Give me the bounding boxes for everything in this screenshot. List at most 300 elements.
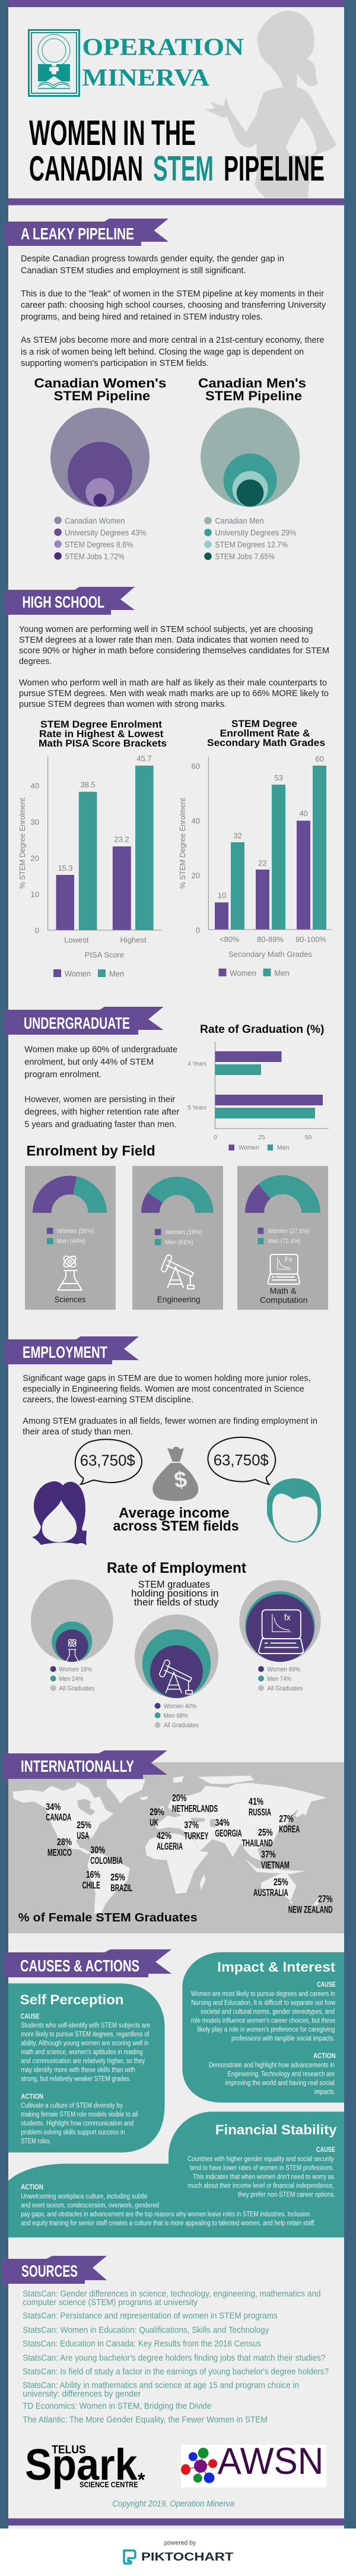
label: Sciences (55, 1295, 85, 1304)
country labels: VIETNAM (261, 1859, 290, 1870)
y axis label: % STEM Degree Enrolment (18, 797, 27, 889)
x axis labels (64, 935, 147, 959)
cause: Students who self-identify with STEM subjects are (21, 2022, 150, 2029)
legend: Canadian Women (65, 517, 125, 526)
cause (187, 2147, 335, 2198)
cause: CAUSE (21, 2013, 40, 2020)
high school text: Women who perform well in math are half as likely as their male counterparts to (19, 678, 327, 688)
section banner: causes and actions (4, 1949, 171, 1977)
cause: ability. Although young women are scoring well in (21, 2040, 149, 2047)
bars (215, 766, 326, 930)
heading (34, 376, 166, 403)
employment chart: engineering (135, 1614, 218, 1729)
donut chart (141, 1177, 214, 1213)
chart heading: Rate of Graduation (%) (200, 1023, 324, 1036)
chart heading: Secondary Math Grades (207, 738, 325, 748)
heading: rate of employment: Rate of Employment (107, 1560, 247, 1576)
action: STEM roles. (21, 2138, 51, 2145)
chart heading: Math PISA Score Brackets (39, 738, 167, 749)
donut chart (245, 1175, 320, 1213)
intro text: As STEM jobs become more and more central in a 21st-century economy, there (21, 335, 324, 345)
legend (218, 969, 290, 978)
y axis ticks (31, 782, 39, 935)
chart heading (39, 719, 167, 749)
icon: man's head (267, 1478, 321, 1543)
value labels: 60 (315, 754, 324, 763)
country labels: 27% (279, 1813, 294, 1824)
country labels: 42% (157, 1830, 171, 1841)
legend (50, 1666, 95, 1692)
legend: Men (274, 969, 290, 978)
section banner: high school: HIGH SCHOOL (23, 593, 104, 611)
icon: atom and flask (66, 1638, 78, 1662)
legend: All Graduates (267, 1685, 303, 1692)
title: CANADIAN (29, 149, 143, 188)
country labels: BRAZIL (110, 1882, 133, 1894)
y axis ticks (192, 762, 200, 935)
y axis ticks: 20 (192, 871, 200, 880)
logo: AWSN: AWSN (218, 2441, 323, 2482)
icon: woman's head (32, 1481, 87, 1545)
heading: enrolment by field: Enrolment by Field (26, 1143, 155, 1159)
country labels: NETHERLANDS (172, 1803, 218, 1814)
value labels: 10 (218, 891, 226, 900)
label: Engineering (157, 1295, 201, 1304)
panel: world map (8, 1762, 344, 1933)
icon: atom and flask (58, 1254, 82, 1290)
chart: Canadian women's pipeline (34, 376, 166, 561)
header (28, 11, 336, 198)
icon: money bag (152, 1447, 198, 1501)
footer: powered by Piktochart (124, 2539, 234, 2564)
chart heading: STEM Degree Enrolment (40, 719, 163, 730)
icon: laptop with formula: fx (284, 1613, 291, 1623)
source list: StatsCan: Education in Canada: Key Results from the 2016 Census (23, 2339, 261, 2349)
country labels: 34% (46, 1801, 61, 1812)
chart heading: STEM Degree (231, 719, 297, 729)
logo: AWSN (181, 2441, 326, 2488)
section banner: employment (4, 1336, 139, 1364)
country labels: COLOMBIA (90, 1855, 123, 1866)
section banner: high school (4, 587, 135, 615)
source list: TD Economics: Women in STEM, Bridging the Divide (23, 2401, 211, 2411)
x axis labels: Lowest (64, 935, 89, 944)
legend: Women 40% (164, 1703, 196, 1710)
footer: powered by Piktochart: PIKTOCHART (141, 2551, 234, 2564)
action: and equity training for senior staff creates a culture that is more appealing to talented women, and help retain staff. (21, 2220, 316, 2227)
panel: financial stability (8, 2112, 344, 2237)
legend: Women (27.6%) (268, 1228, 310, 1235)
panel: impact and interest (182, 1952, 344, 2103)
speech bubble: men's income: 63,750$ (214, 1451, 269, 1469)
icon: pump jack (158, 1659, 192, 1694)
bar chart: rate of graduation (187, 1023, 329, 1152)
legend (155, 1229, 202, 1246)
legend: Men (44%) (57, 1238, 85, 1245)
heading: STEM Pipeline (54, 388, 150, 403)
chart: Canadian men's pipeline (198, 376, 306, 561)
action: Cultivate a culture of STEM diversity by (21, 2102, 123, 2109)
action: Demonstrate and highlight how advancements in (209, 2062, 335, 2069)
value labels: 32 (233, 832, 242, 840)
country labels: UK (150, 1817, 158, 1828)
country labels: AUSTRALIA (253, 1887, 288, 1898)
legend: Women 69% (267, 1666, 300, 1673)
legend (53, 969, 124, 978)
high school text (19, 624, 329, 709)
intro text: Canadian STEM studies and employment is still significant. (21, 265, 246, 276)
bar chart: PISA score brackets (18, 719, 167, 978)
action: ACTION (21, 2093, 43, 2100)
speech bubble: women's income (75, 1439, 142, 1484)
category labels: 5 Years (187, 1105, 206, 1111)
action: Engineering, Technology and research are (228, 2071, 335, 2078)
title (29, 113, 325, 188)
intro text: Despite Canadian progress towards gender equity, the gender gap in (21, 254, 284, 264)
high school text: score 90% or higher in math before considering themselves candidates for STEM (19, 646, 329, 656)
section banner: internationally: INTERNATIONALLY (21, 1757, 134, 1775)
value labels: 38.5 (80, 780, 96, 789)
source list: StatsCan: Persistance and representation of women in STEM programs (23, 2311, 278, 2321)
legend (47, 1228, 94, 1245)
icon: money bag: $ (173, 1467, 189, 1493)
source list: The Atlantic: The More Gender Equality, the Fewer Women in STEM (23, 2415, 268, 2425)
undergraduate text (24, 1045, 179, 1130)
employment chart: math and computation (239, 1580, 321, 1692)
cause: societal and cultural norms, gender stereotypes, and (201, 2008, 335, 2015)
employment text: careers, the lowest-earning STEM discipline. (23, 1395, 193, 1405)
country labels: 29% (150, 1806, 164, 1818)
cause: they prefer non-STEM career options. (238, 2191, 335, 2198)
country labels: 41% (249, 1796, 263, 1807)
high school text: Young women are performing well in STEM school subjects, yet are choosing (19, 624, 313, 634)
country labels: 25% (274, 1876, 288, 1888)
intro text: career path: choosing high school courses, choosing and transferring University (21, 300, 326, 310)
icon: laptop with formula: Fx (285, 1256, 293, 1263)
value labels: 53 (274, 773, 283, 782)
chart heading: Rate in Highest & Lowest (39, 729, 164, 739)
action (209, 2053, 336, 2095)
y axis ticks: 0 (35, 926, 39, 935)
logo wordmark: OPERATION (82, 33, 244, 61)
y axis ticks: 40 (31, 782, 39, 791)
nested circles (201, 407, 300, 507)
legend: All Graduates (164, 1722, 199, 1729)
icon: laptop with formula (268, 1254, 300, 1284)
action (21, 2093, 138, 2145)
intro text: supporting women's participation in STEM fields. (21, 358, 209, 368)
cause: more likely to pursue STEM degrees, regardless of (21, 2031, 150, 2038)
label (260, 1286, 308, 1305)
x axis ticks: 0 (214, 1134, 217, 1141)
action: and overt sexism, condescension, overwork, gendered (21, 2202, 159, 2209)
cause: strong, but relatively weaker STEM grades. (21, 2075, 131, 2082)
heading: Impact & Interest (217, 1959, 335, 1975)
source list (23, 2289, 329, 2425)
legend: All Graduates (59, 1685, 95, 1692)
cause: CAUSE (316, 2147, 335, 2154)
employment text (23, 1373, 317, 1437)
icon: Piktochart mark (124, 2550, 135, 2564)
undergraduate text: Women make up 60% of undergraduate (24, 1045, 177, 1055)
legend: STEM Jobs 1.72% (65, 552, 125, 561)
legend: Men (72.4%) (268, 1238, 300, 1245)
cause: CAUSE (317, 1981, 336, 1989)
cause: Countries with higher gender equality and social security (187, 2155, 334, 2163)
x axis labels: 90-100% (295, 935, 326, 944)
nested circles (50, 407, 150, 507)
cause (21, 2013, 150, 2082)
source list: StatsCan: Ability in mathematics and science at age 15 and program choice in (23, 2381, 299, 2391)
title: STEM (153, 149, 214, 188)
section banner: causes and actions: CAUSES & ACTIONS (20, 1957, 139, 1975)
high school text: STEM degrees at a lower rate than men. Data indicates that women need to (19, 635, 309, 645)
logo: TELUS Spark Science Centre: Spark (25, 2440, 138, 2489)
value labels: 22 (258, 859, 267, 868)
y axis ticks: 40 (192, 817, 200, 826)
logo: TELUS Spark Science Centre: TELUS (52, 2444, 86, 2457)
heading: Self Perception (20, 1992, 124, 2007)
x axis labels: PISA Score (85, 950, 124, 959)
bars (215, 1051, 323, 1118)
logo wordmark: MINERVA (82, 64, 209, 91)
source list: StatsCan: Is field of study a factor in the earnings of young bachelor's degree holders? (23, 2367, 329, 2377)
heading: STEM Pipeline (205, 388, 302, 403)
cause: Nursing and Education. It is difficult to separate out how (191, 1999, 336, 2006)
legend: University Degrees 43% (65, 529, 146, 538)
subheading: holding positions in (131, 1588, 218, 1599)
action: students. Highlight how communication and (21, 2120, 134, 2127)
subheading (131, 1579, 219, 1608)
legend (204, 517, 296, 561)
country labels: ALGERIA (157, 1841, 183, 1852)
income heading (113, 1505, 239, 1534)
x axis labels: Secondary Math Grades (228, 950, 312, 959)
legend (228, 1145, 290, 1152)
y axis ticks: 60 (192, 762, 200, 771)
panel: self perception (8, 1983, 165, 2153)
action (21, 2184, 316, 2227)
action: problem-solving skills support success in (21, 2129, 125, 2136)
source list: StatsCan: Gender differences in science, technology, engineering, mathematics and (23, 2289, 320, 2299)
value labels: 40 (299, 809, 308, 818)
cause: This indicates that when women don't need to worry as (193, 2173, 334, 2180)
cause: professions with tangible social impacts. (231, 2035, 335, 2042)
section banner: undergraduate (4, 1007, 164, 1035)
legend: Men (277, 1145, 290, 1152)
cause: much about their income level or financial independence, (187, 2182, 334, 2189)
country labels: 37% (184, 1819, 199, 1831)
cause: may identify more with these skills than with (21, 2066, 135, 2074)
heading: Canadian Men's (198, 376, 306, 391)
icon: laptop with formula (259, 1610, 303, 1654)
intro text: This is due to the "leak" of women in the STEM pipeline at key moments in their (21, 289, 324, 299)
logo: TELUS Spark Science Centre: SCIENCE CENTRE (80, 2480, 138, 2489)
action: impacts. (314, 2088, 335, 2095)
copyright: Copyright 2019, Operation Minerva (112, 2499, 234, 2509)
cause (191, 1981, 336, 2042)
intro text: programs, and being hired and retained in STEM industry roles. (21, 312, 263, 322)
legend: Men 68% (164, 1712, 188, 1720)
intro text (21, 254, 326, 368)
action: ACTION (21, 2184, 43, 2191)
country labels: CHILE (82, 1879, 100, 1891)
bar chart: secondary math grades (179, 719, 332, 978)
action: Unwelcoming workplace culture, including subtle (21, 2193, 147, 2200)
country labels: THAILAND (242, 1837, 273, 1848)
speech bubble: women's income: 63,750$ (80, 1452, 135, 1469)
legend (258, 1228, 310, 1245)
employment text: Significant wage gaps in STEM are due to women holding more junior roles, (23, 1373, 311, 1383)
panel: engineering (132, 1166, 223, 1310)
legend (258, 1666, 303, 1692)
x axis ticks: 25 (258, 1134, 265, 1141)
legend (155, 1703, 199, 1729)
employment text: their area of study than men. (23, 1427, 133, 1437)
legend: Women 16% (59, 1666, 92, 1673)
country labels: 37% (261, 1848, 276, 1860)
category labels: 4 Years (187, 1061, 206, 1067)
value labels: 15.3 (58, 864, 73, 873)
high school text: pursue STEM degrees than women with strong marks. (19, 699, 227, 709)
value labels: 45.7 (136, 754, 152, 763)
country labels: USA (77, 1830, 89, 1841)
icon: pump jack (160, 1254, 194, 1289)
legend: STEM Degrees 12.7% (215, 541, 288, 549)
country labels: GEORGIA (215, 1828, 242, 1839)
employment text: especially in Engineering fields. Women are most concentrated in Science (23, 1384, 304, 1394)
heading: Canadian Women's (34, 376, 166, 391)
label: Computation (260, 1295, 308, 1305)
income heading: Average income (119, 1505, 229, 1521)
x axis labels: <80% (220, 935, 240, 944)
country labels: 25% (77, 1819, 91, 1831)
chart heading: Enrollment Rate & (220, 728, 310, 739)
y axis ticks: 20 (31, 854, 39, 863)
cause: math and science, women's aptitudes in reading (21, 2049, 143, 2056)
section banner: sources: SOURCES (21, 2262, 78, 2280)
logo wordmark (82, 33, 244, 91)
x axis ticks: 50 (305, 1134, 312, 1141)
silhouette of a woman (204, 11, 336, 198)
country labels: RUSSIA (249, 1806, 271, 1818)
action: ACTION (313, 2053, 336, 2060)
country labels: KOREA (279, 1823, 300, 1835)
x axis labels (220, 935, 326, 959)
section banner: employment: EMPLOYMENT (23, 1343, 107, 1361)
cause: likely play a role in women's preference for caregiving (198, 2026, 335, 2033)
undergraduate text: program enrolment. (24, 1070, 101, 1080)
heading: Financial Stability (215, 2122, 337, 2137)
action: making female STEM role models visible to all (21, 2111, 138, 2118)
legend: University Degrees 29% (215, 529, 296, 538)
legend: Women (56%) (57, 1228, 94, 1235)
value labels (58, 754, 152, 873)
legend: Men 24% (59, 1676, 84, 1683)
legend (54, 517, 147, 561)
bars (56, 766, 154, 930)
cause: and communication are relatively higher, so they (21, 2057, 145, 2065)
country labels: 20% (172, 1792, 187, 1803)
legend: Canadian Men (215, 517, 264, 526)
speech bubble: men's income (208, 1437, 275, 1484)
heading (198, 376, 306, 403)
legend: Men 74% (267, 1676, 291, 1683)
section banner: internationally (3, 1750, 167, 1779)
country labels: 34% (215, 1817, 230, 1828)
country labels (46, 1792, 333, 1915)
legend: STEM Jobs 7.65% (215, 552, 275, 561)
title: WOMEN IN THE (29, 113, 196, 153)
world map landmasses (12, 1775, 327, 1914)
section banner: a leaky pipeline (4, 219, 169, 246)
panel: math and computation (237, 1166, 328, 1310)
legend: Women (230, 969, 256, 978)
subheading: their fields of study (134, 1597, 219, 1608)
legend: STEM Degrees 8.6% (65, 541, 133, 549)
country labels: 25% (110, 1872, 125, 1883)
income heading: across STEM fields (113, 1518, 239, 1534)
source list: StatsCan: Are young bachelor's degree holders finding jobs that match their studies? (23, 2353, 325, 2363)
country labels: CANADA (46, 1812, 71, 1823)
value labels (218, 754, 324, 900)
x axis labels: 80-89% (257, 935, 284, 944)
section banner: undergraduate: UNDERGRADUATE (24, 1014, 130, 1032)
legend: Women (65, 969, 91, 978)
category labels (187, 1061, 206, 1111)
cause: tend to have lower rates of women in STEM professions. (190, 2164, 334, 2172)
country labels: 30% (90, 1844, 105, 1856)
employment text: Among STEM graduates in all fields, fewer women are finding employment in (23, 1416, 317, 1426)
undergraduate text: degrees, with higher retention rate after (24, 1107, 179, 1117)
legend: Men (109, 969, 124, 978)
country labels: 27% (318, 1893, 333, 1904)
donut chart (33, 1175, 107, 1213)
country labels: 16% (86, 1869, 100, 1880)
country labels: TURKEY (184, 1830, 209, 1841)
map caption: % of Female STEM Graduates (18, 1911, 198, 1924)
legend: Women (239, 1145, 259, 1152)
y axis ticks: 30 (31, 818, 39, 827)
chart heading (207, 719, 325, 748)
section banner: a leaky pipeline: A LEAKY PIPELINE (21, 225, 134, 243)
panel: sciences (25, 1166, 116, 1310)
subheading: STEM graduates (138, 1579, 210, 1590)
value labels: 23.2 (114, 835, 129, 844)
employment chart: sciences (31, 1579, 113, 1692)
legend: Women (19%) (166, 1229, 202, 1236)
country labels: 28% (57, 1837, 72, 1848)
x axis labels: Highest (120, 935, 147, 944)
logo: TELUS Spark Science Centre: * (138, 2469, 145, 2490)
footer: powered by Piktochart: powered by (164, 2539, 196, 2546)
undergraduate text: 5 years and graduating faster than men. (24, 1120, 176, 1130)
source list: computer science (STEM) programs at university (23, 2297, 198, 2308)
y axis label: % STEM Degree Enrolment (179, 797, 187, 889)
y axis ticks: 10 (31, 890, 39, 899)
high school text: degrees. (19, 656, 52, 666)
country labels: MEXICO (47, 1847, 72, 1858)
source list: university: differences by gender (23, 2389, 141, 2399)
source list: StatsCan: Women in Education: Qualifications, Skills and Technology (23, 2325, 269, 2335)
Operation Minerva logo mark (28, 29, 80, 97)
x axis ticks (214, 1134, 312, 1141)
y axis ticks: 0 (196, 926, 200, 935)
label: Math & (270, 1286, 297, 1295)
undergraduate text: enrolment, but only 44% of STEM (24, 1057, 154, 1067)
section banner: sources (2, 2256, 107, 2284)
legend: Men (81%) (166, 1239, 193, 1246)
